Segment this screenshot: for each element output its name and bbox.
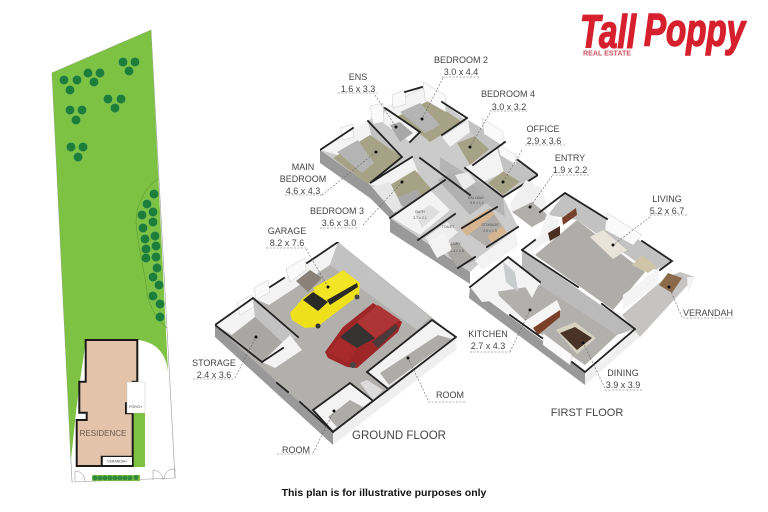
living left structure: [523, 213, 560, 254]
room labels: 1.9 x 2.2: [553, 165, 587, 175]
room labels: GARAGE: [268, 226, 306, 236]
room labels: 5.2 x 6.7: [650, 206, 684, 216]
heading: ground floor: GROUND FLOOR: [352, 430, 446, 442]
room labels: 8.2 x 7.6: [270, 238, 304, 248]
toilet: [425, 222, 458, 250]
logo: Tall Poppy: [580, 4, 746, 58]
storage room upper: [460, 208, 518, 270]
room labels: 3.6 x 3.0: [322, 218, 356, 228]
entry room: [510, 180, 550, 228]
bathroom: [392, 190, 450, 235]
dining table: [556, 322, 596, 354]
corridor wall: [440, 157, 505, 217]
tv unit: [562, 208, 577, 225]
room labels: ROOM: [436, 390, 464, 400]
living floor: [535, 220, 645, 310]
lawn: [52, 30, 168, 460]
living back wall: [548, 193, 672, 270]
room labels: ENTRY: [555, 153, 585, 163]
room labels: DINING: [607, 368, 639, 378]
logo: Tall Poppy: Tall: [580, 6, 637, 58]
room labels: OFFICE: [526, 124, 560, 134]
room labels: 3.1 x 1.8: [450, 249, 464, 253]
room labels: STORAGE: [481, 223, 499, 227]
sofas: [590, 230, 657, 273]
laundry: [428, 232, 475, 268]
fireplace: [548, 226, 560, 241]
room labels: 3.9 x 3.9: [606, 380, 640, 390]
panel: site plan: [52, 30, 175, 482]
red car: [325, 303, 402, 368]
room labels: 2.9 x 3.6: [527, 136, 561, 146]
wing wall outlines: [320, 87, 538, 268]
room labels: MAIN: [292, 162, 314, 172]
yellow car: [290, 270, 360, 328]
main bedroom: [320, 121, 402, 184]
verandah: [103, 457, 132, 465]
wall outlines: [215, 242, 456, 432]
logo: Tall Poppy: REAL ESTATE: [583, 48, 631, 58]
room labels: HALLWAY: [468, 196, 485, 200]
room labels: 3.0 x 3.2: [492, 102, 526, 112]
room labels: 2.7 x 4.3: [471, 341, 505, 351]
kitchen dining floor: [495, 285, 617, 365]
room labels: 2.5 x 1.9: [483, 229, 497, 233]
garden bed outline: [136, 179, 167, 328]
room labels: 4.6 x 4.3: [286, 186, 320, 196]
room labels: 5.6 x 1.1: [470, 201, 484, 205]
room labels: 2.4 x 3.6: [197, 370, 231, 380]
residence label: RESIDENCE: [80, 429, 126, 438]
kitchen dining left face: [469, 287, 585, 385]
wing outer faces: [320, 150, 470, 284]
panel: ground floor plan: [215, 242, 457, 445]
kitchen base: [470, 257, 540, 320]
garage back wall: [253, 242, 338, 305]
living windows: [605, 213, 642, 245]
room dots and leaders: [193, 77, 733, 454]
porch: [127, 382, 145, 413]
bottom room: [313, 383, 372, 430]
heading: first floor: FIRST FLOOR: [551, 407, 623, 419]
slab left face: [215, 325, 333, 445]
disclaimer: This plan is for illustrative purposes only: [282, 487, 487, 499]
bedroom 4: [442, 118, 505, 165]
bedroom 2: [385, 82, 462, 142]
room labels: TOILET: [442, 225, 455, 229]
chairs: [296, 270, 322, 292]
hedge: [92, 475, 140, 481]
kitchen walls: [470, 258, 540, 302]
wing base: [320, 87, 538, 272]
gates: [75, 469, 175, 481]
dining windows: [543, 333, 625, 369]
kitchen dining right face: [585, 329, 635, 385]
kitchen bench: [525, 300, 561, 335]
room labels: VERANDAH: [683, 308, 733, 318]
panel: first floor bedroom wing: [320, 82, 538, 284]
partition wall: [522, 250, 635, 335]
verandah table: [659, 273, 695, 293]
right room: [367, 320, 456, 388]
verandah floor: [622, 272, 695, 337]
hallway: [438, 170, 490, 215]
room labels: 3.7 x 2.1: [413, 216, 427, 220]
office: [465, 145, 538, 195]
room labels: ROOM: [282, 445, 310, 455]
window frames: [237, 258, 306, 315]
room labels: BEDROOM 3: [310, 206, 364, 216]
room labels: STORAGE: [192, 358, 236, 368]
room labels: 1.6 x 3.3: [341, 84, 375, 94]
room labels: LDRY: [451, 242, 461, 246]
room labels: BEDROOM: [280, 174, 326, 184]
first floor wall outlines: [470, 193, 672, 372]
room labels: BEDROOM 2: [434, 55, 488, 65]
garage side wall: [330, 242, 430, 330]
site boundary: [52, 30, 175, 482]
panel: entry and living: [469, 180, 695, 385]
room labels: BATH: [415, 210, 425, 214]
storage room: [215, 298, 302, 368]
side lawn strip: [133, 413, 145, 467]
trees: [59, 57, 165, 322]
ensuite: [370, 103, 420, 142]
slab right face: [333, 337, 457, 445]
room labels: [192, 55, 733, 455]
white deck edge: [613, 310, 640, 341]
verandah: VERANDAH: [107, 460, 127, 464]
residence building: [77, 340, 137, 466]
room labels: 3.0 x 4.4: [444, 67, 478, 77]
bedroom 3: [370, 157, 432, 213]
garage floor: [215, 242, 456, 432]
door frame: [623, 267, 660, 310]
room labels: ENS: [349, 72, 367, 82]
stair block: [455, 172, 476, 190]
porch: PORCH: [129, 405, 142, 409]
stairs: [360, 380, 383, 400]
room labels: BEDROOM 4: [481, 89, 535, 99]
room labels: LIVING: [652, 194, 682, 204]
room labels: KITCHEN: [468, 329, 508, 339]
